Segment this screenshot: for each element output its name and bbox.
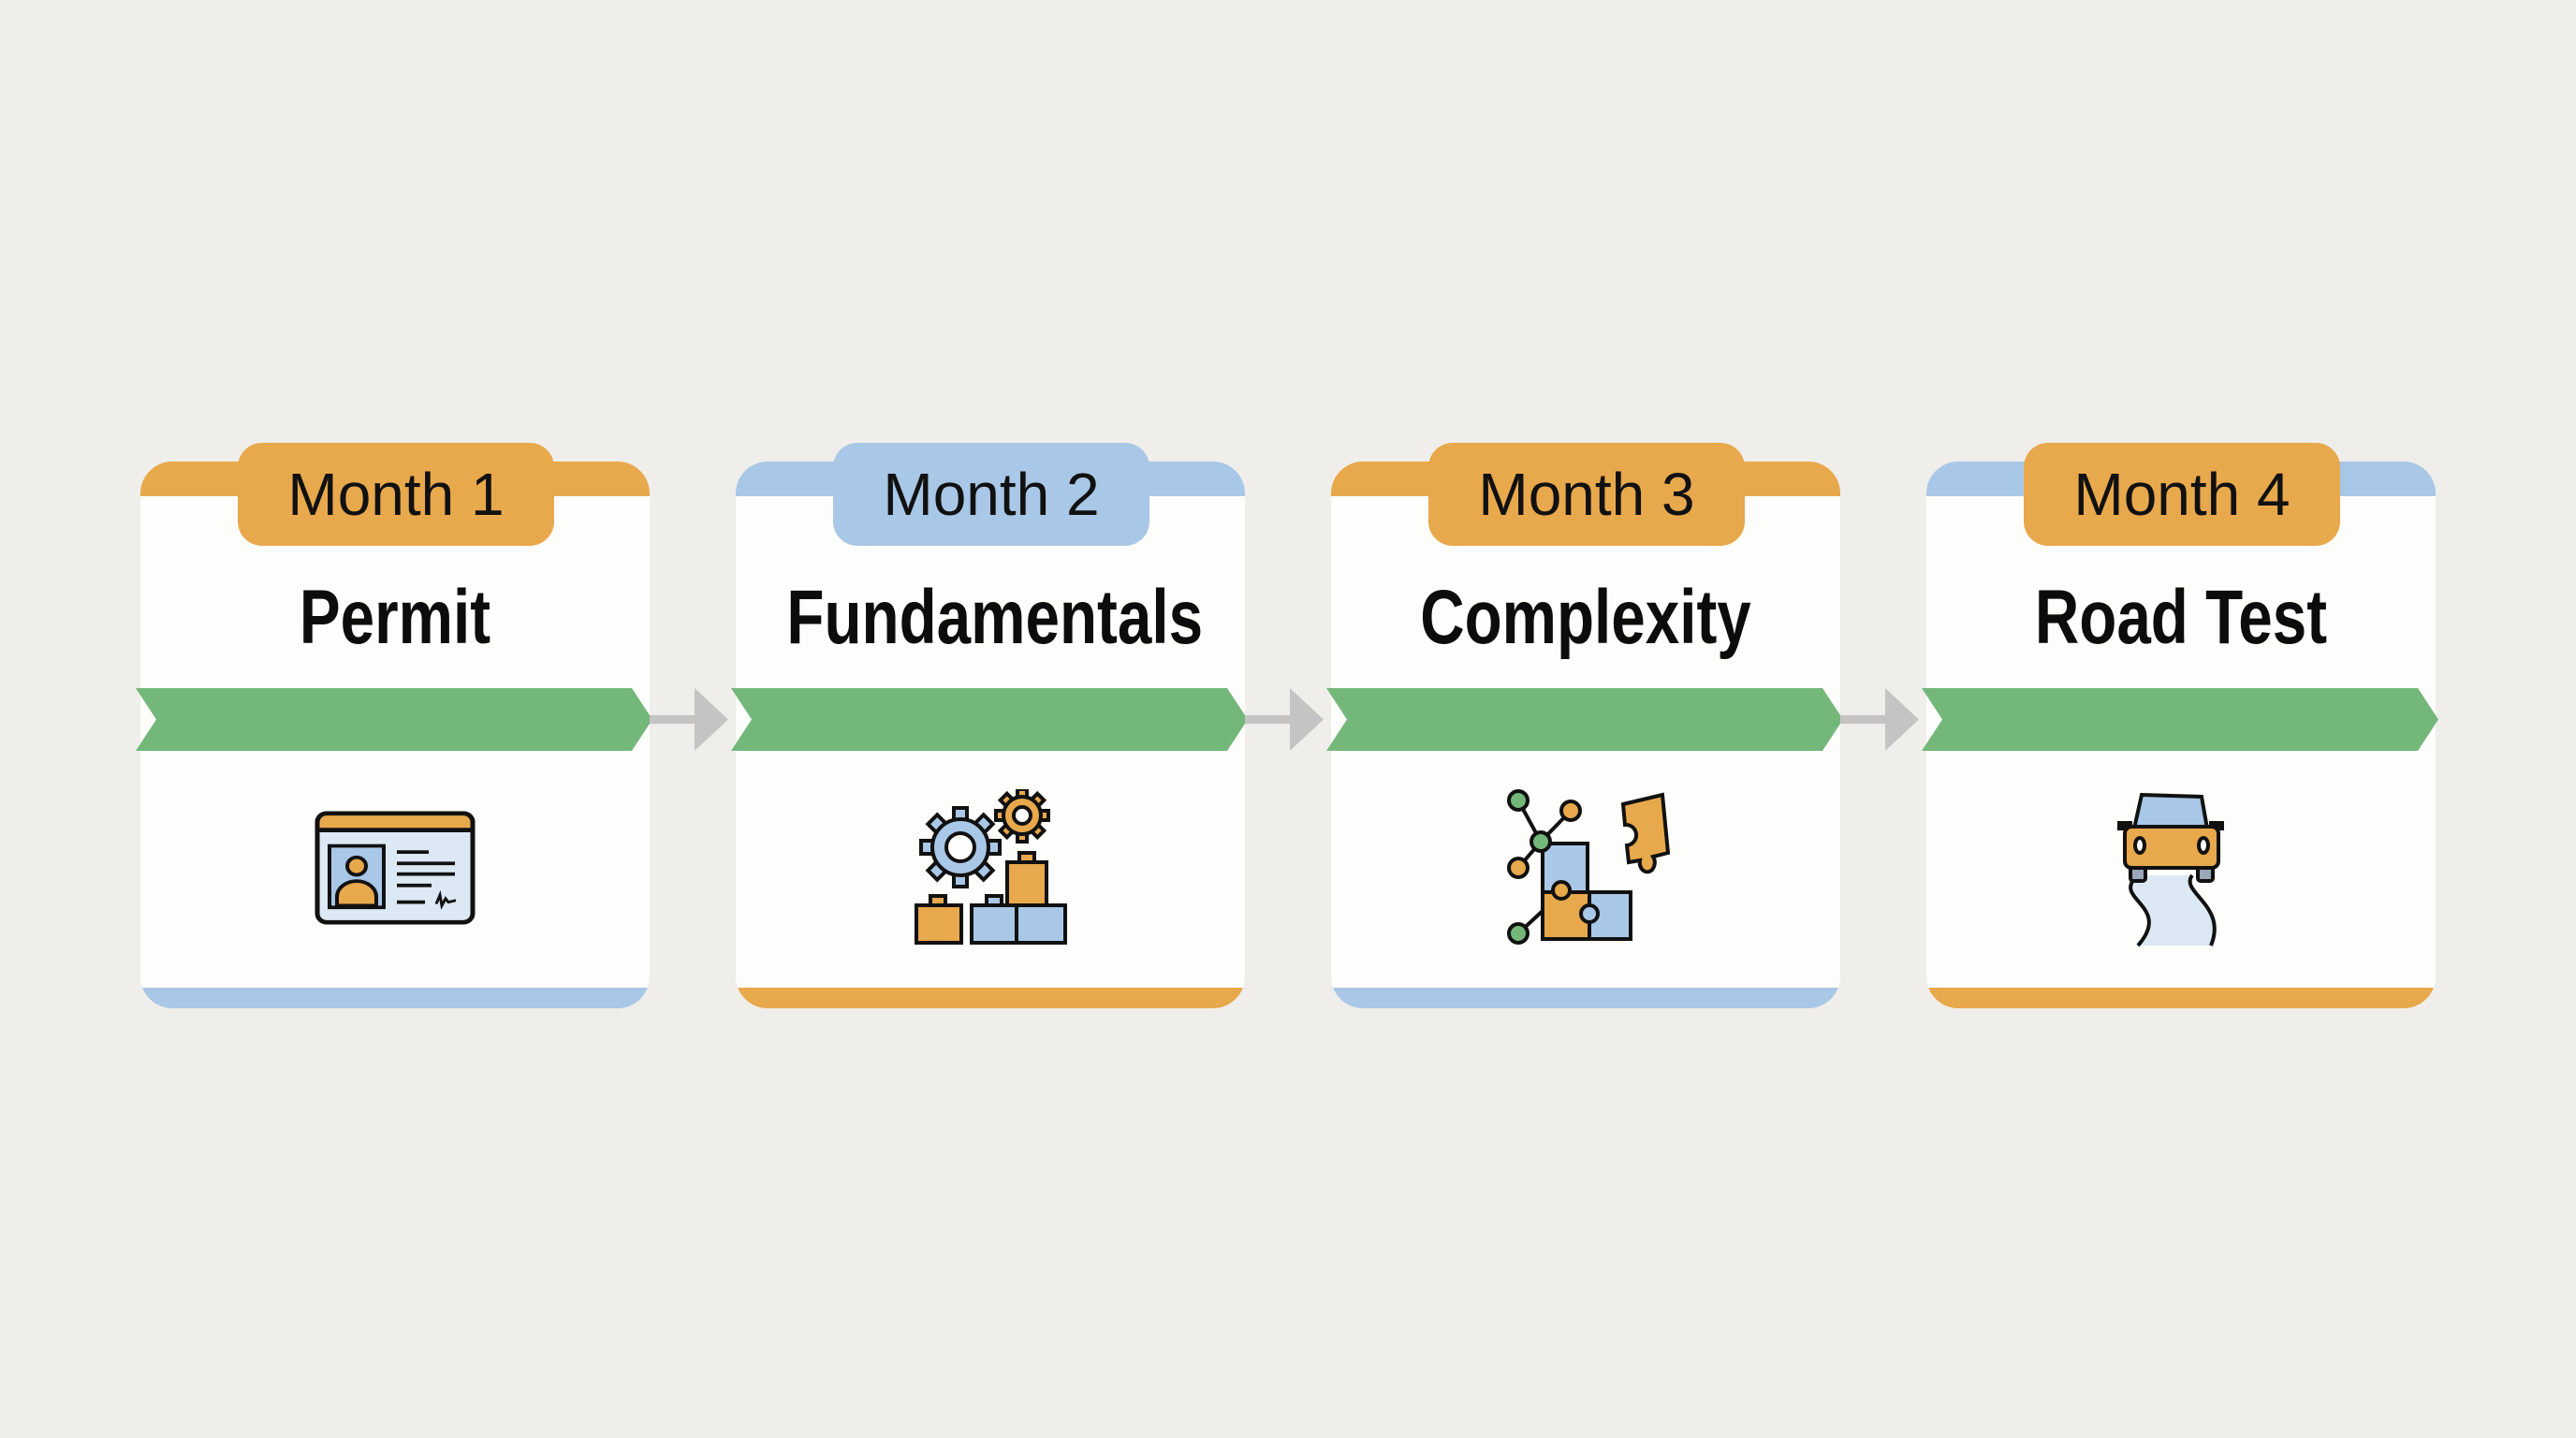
green band <box>136 688 650 751</box>
tab: Month 1: Month 1 <box>287 461 505 528</box>
card: Month 3 Complexity <box>1326 443 1840 1008</box>
title: Permit: Permit <box>300 575 490 660</box>
tab: Month 3 <box>1428 443 1745 546</box>
tab: Month 1 <box>238 443 554 546</box>
icon: gears and blocks <box>915 789 1067 945</box>
green band <box>1326 688 1840 751</box>
tab: Month 4 <box>2024 443 2340 546</box>
tab: Month 2: Month 2 <box>883 461 1100 528</box>
tab: Month 2 <box>833 443 1149 546</box>
title: Road Test: Road Test <box>2035 575 2327 660</box>
arrow 1 <box>650 688 728 751</box>
green band <box>1922 688 2438 751</box>
title: Complexity: Complexity <box>1420 575 1751 660</box>
card: Month 4 Road Test <box>1922 443 2438 1008</box>
title: Fundamentals: Fundamentals <box>786 575 1203 660</box>
arrow 3 <box>1840 688 1919 751</box>
icon: puzzle network <box>1507 789 1670 945</box>
icon: permit card <box>315 811 476 925</box>
arrow 2 <box>1245 688 1324 751</box>
tab: Month 4: Month 4 <box>2073 461 2291 528</box>
icon: car on winding road <box>2117 793 2224 947</box>
card: Month 1 Permit <box>136 443 650 1008</box>
green band <box>731 688 1245 751</box>
card: Month 2 Fundamentals <box>731 443 1245 1008</box>
tab: Month 3: Month 3 <box>1478 461 1695 528</box>
